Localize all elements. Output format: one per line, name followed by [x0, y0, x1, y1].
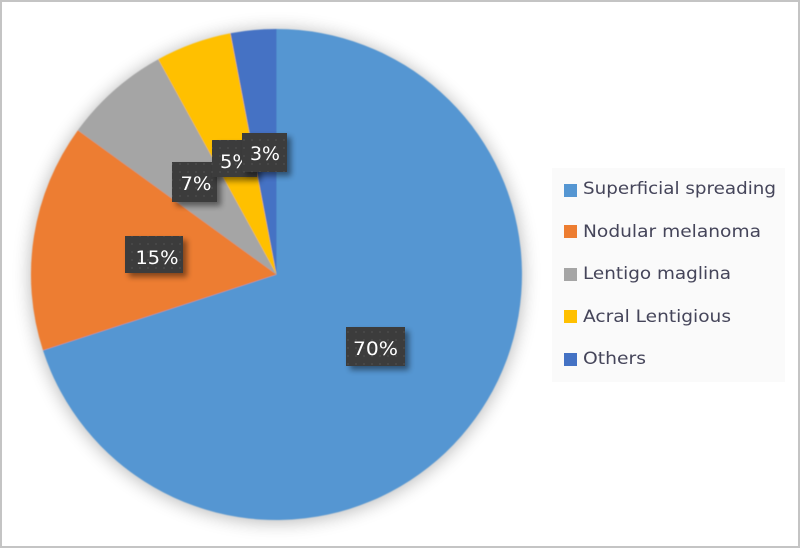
legend item: Superficial spreading: Superficial spreading: [583, 179, 776, 199]
slice: Superficial spreading 70%: [43, 29, 522, 520]
data label: 7%: [172, 162, 221, 206]
data label: 3%: 3%: [250, 143, 280, 165]
legend item: Others: Others: [583, 349, 646, 369]
legend item: Nodular melanoma: Nodular melanoma: [583, 222, 761, 242]
legend: [552, 168, 785, 382]
data label: 7%: 7%: [180, 173, 212, 195]
slice: Others 3%: [230, 29, 276, 275]
slice: Nodular melanoma 15%: [31, 130, 277, 350]
data label: 70%: [346, 327, 409, 370]
data label: 5%: [212, 140, 261, 181]
data label: 15%: [125, 236, 187, 277]
slice: Lentigo maglina 7%: [78, 59, 277, 275]
legend item: Acral Lentigious: Acral Lentigious: [583, 307, 731, 327]
legend item: Lentigo maglina: Lentigo maglina: [583, 264, 731, 284]
slice: Acral Lentigious 5%: [158, 33, 276, 274]
data label: 5%: 5%: [220, 151, 251, 173]
pie chart: [31, 29, 522, 520]
data label: 15%: 15%: [136, 247, 178, 269]
data label: 3%: [242, 133, 291, 176]
legend item: Others: [564, 349, 646, 369]
data label: 70%: 70%: [353, 338, 398, 360]
